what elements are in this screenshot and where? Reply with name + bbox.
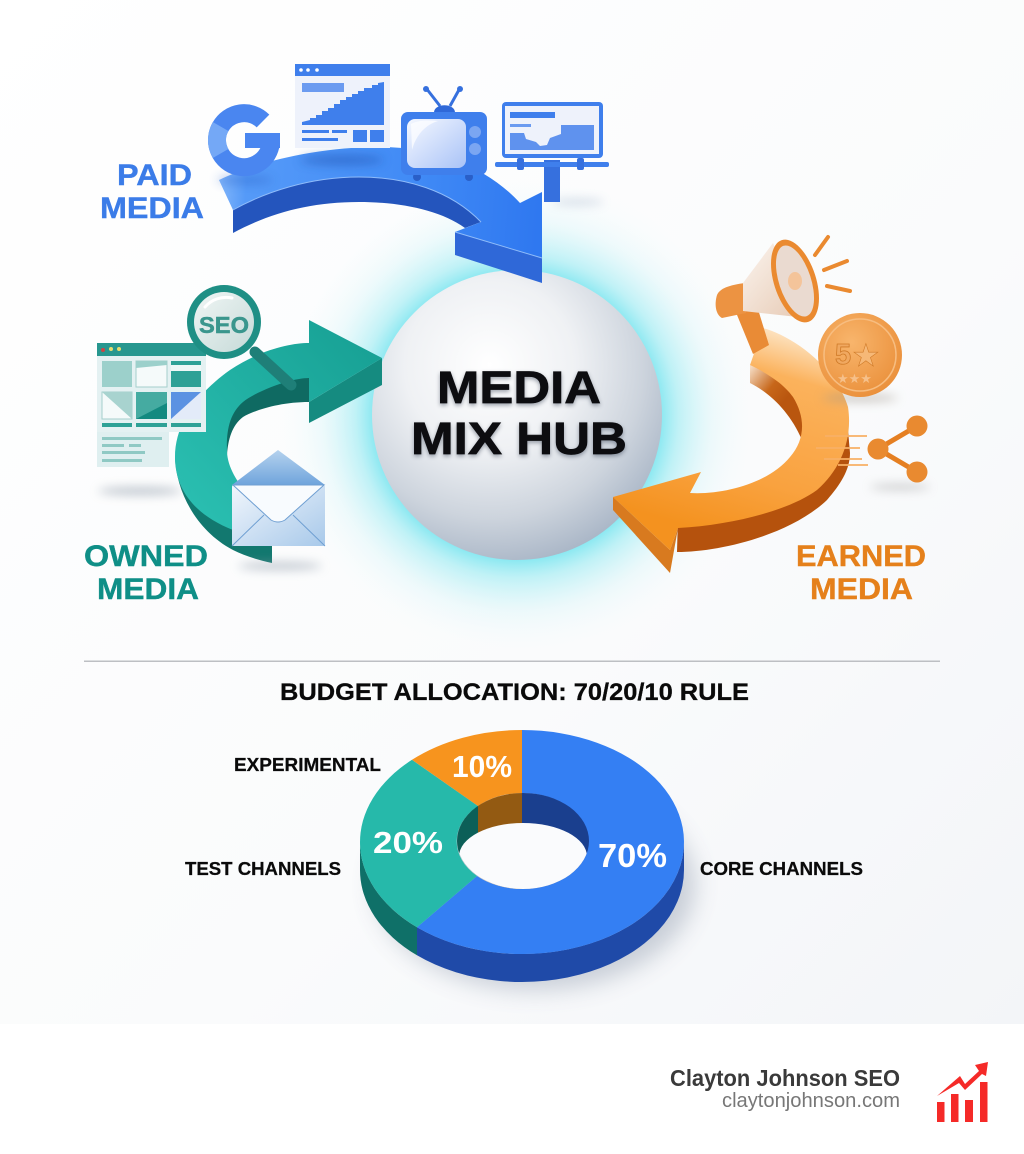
icon: ad browser window [295,64,390,165]
hub title: MEDIA [437,362,601,413]
owned media arrow [175,320,382,563]
donut labels [185,754,863,879]
segment: 70% core [417,730,684,954]
icon: five star medal: 5 [835,339,851,371]
segment: 10% experimental [412,730,522,806]
donut labels: EXPERIMENTAL [234,754,381,775]
earned media label: MEDIA [810,573,913,606]
footer brand text: Clayton Johnson SEO [670,1065,900,1091]
donut chart [360,730,695,990]
icon: five star medal [818,313,902,402]
paid media label: PAID [117,159,192,192]
hub title: MIX HUB [411,413,627,464]
icon: envelope [232,450,325,570]
paid media arrow [219,147,542,283]
owned media label: MEDIA [97,573,199,606]
hub title [411,362,627,464]
icon: five star medal: ★ [852,338,880,374]
icon: five star medal: ★★★ [837,372,872,387]
icon: television [401,86,487,181]
owned media label: OWNED [84,540,208,573]
icon: billboard [495,102,609,205]
paid media label [100,159,204,225]
percentage values: 10% [452,749,512,784]
earned media arrow [613,328,868,573]
donut labels: CORE CHANNELS [700,858,863,879]
icon: SEO magnifier: SEO [199,312,249,338]
owned media label [84,540,208,606]
segment: 20% test [360,760,478,927]
icon: owned media web page [97,343,206,495]
earned media label [796,540,926,606]
hub sphere [372,270,662,560]
percentage values [373,749,667,874]
icon: SEO magnifier [187,285,291,385]
footer brand text: claytonjohnson.com [722,1090,900,1112]
budget heading: BUDGET ALLOCATION: 70/20/10 RULE [280,679,749,706]
hub glow [272,171,762,661]
paid media label: MEDIA [100,192,204,225]
icon: google G [217,113,280,184]
earned media label: EARNED [796,540,926,573]
icon: megaphone [716,234,850,354]
percentage values: 20% [373,825,443,860]
donut hole [457,793,589,889]
donut labels: TEST CHANNELS [185,858,341,879]
percentage values: 70% [598,837,667,874]
icon: share nodes [868,416,930,490]
icon: footer growth chart [937,1062,988,1122]
sound lines [815,237,850,291]
footer brand text [670,1065,900,1112]
